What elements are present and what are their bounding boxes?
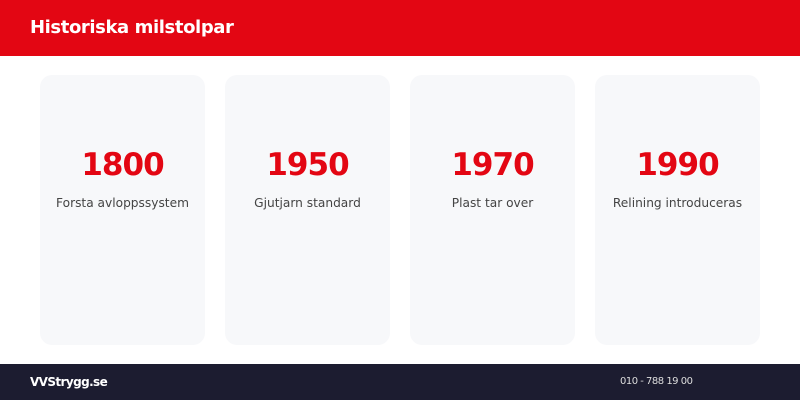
label: Relining introduceras	[613, 196, 742, 210]
label: Forsta avloppssystem	[56, 196, 189, 210]
footer	[0, 364, 800, 400]
header bar	[0, 0, 800, 56]
label: Plast tar over	[452, 196, 533, 210]
year 1990: 1990	[636, 147, 719, 183]
year 1950: 1950	[266, 147, 349, 183]
card: 1950	[225, 75, 390, 345]
card: 1970	[410, 75, 575, 345]
card: 1990	[595, 75, 760, 345]
label: Gjutjarn standard	[254, 196, 361, 210]
card: 1800	[40, 75, 205, 345]
title: Historiska milstolpar	[30, 17, 234, 38]
year 1800: 1800	[81, 147, 164, 183]
year 1970: 1970	[451, 147, 534, 183]
brand: VVStrygg.se	[30, 375, 107, 389]
phone: 010 - 788 19 00	[620, 376, 692, 387]
